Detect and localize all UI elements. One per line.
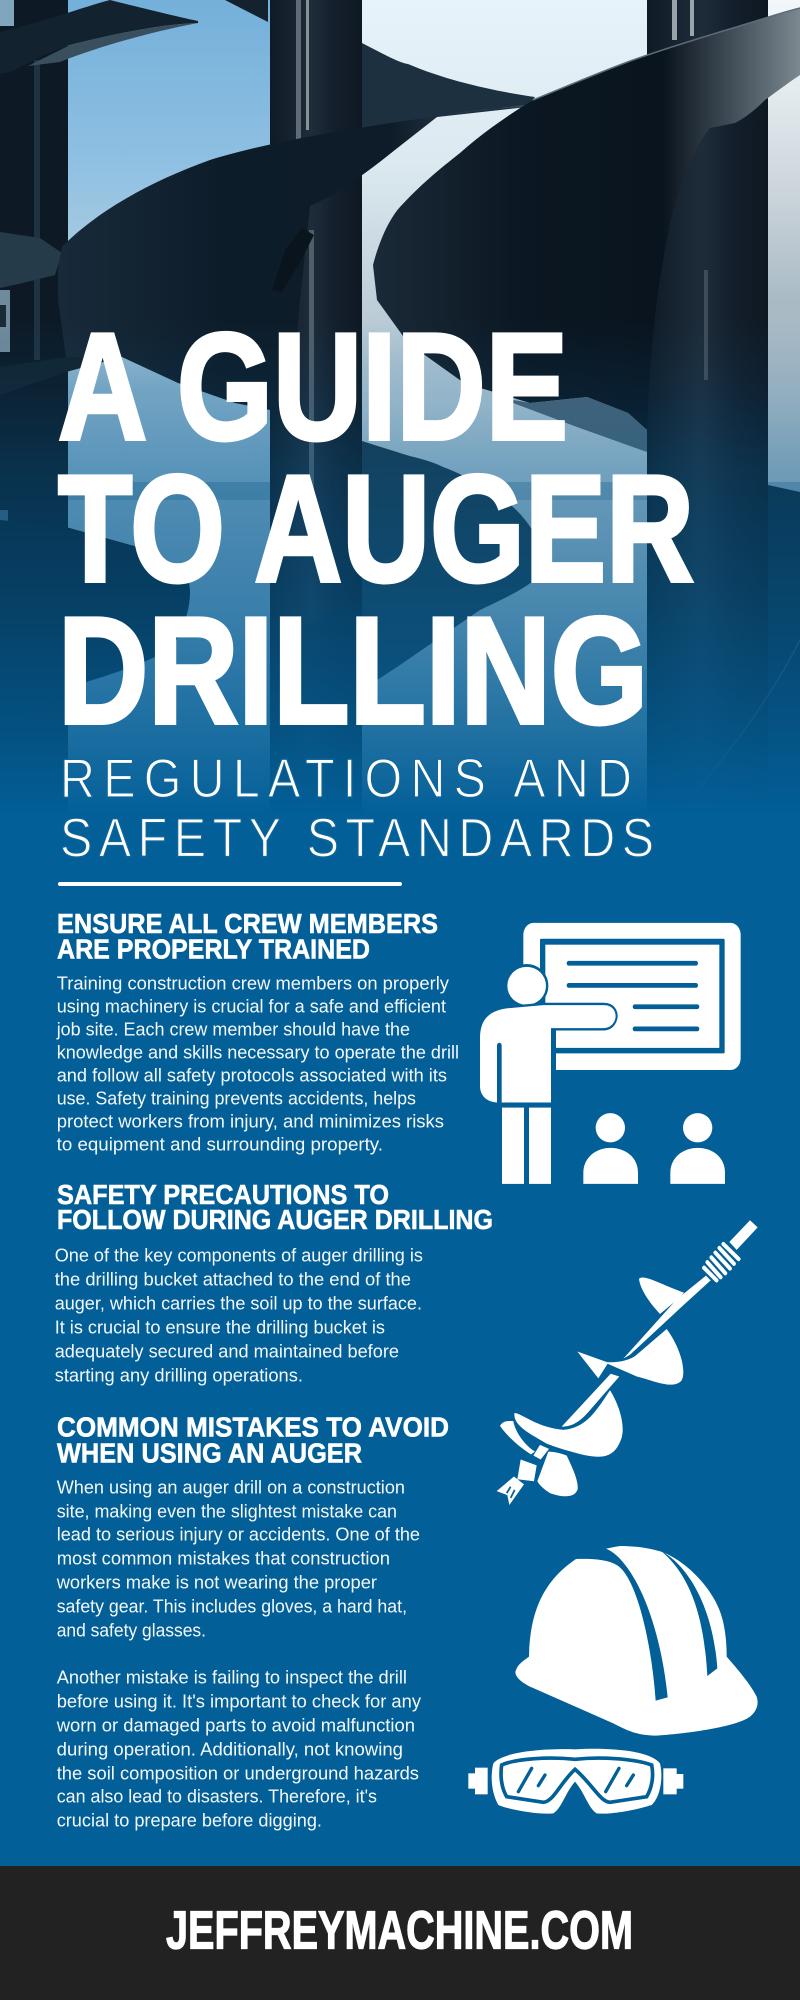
title: DRILLING xyxy=(58,586,648,756)
text block: safety precautions: starting any drilling operations. xyxy=(55,1364,303,1385)
text block: inspection mistake xyxy=(56,1666,422,1831)
text block: safety gear mistake: safety gear. This includes gloves, a hard hat, xyxy=(57,1595,407,1616)
icon: auger bit xyxy=(497,1220,758,1505)
text block: inspection mistake: during operation. Additionally, not knowing xyxy=(57,1738,403,1759)
text block: safety precautions: the drilling bucket attached to the end of the xyxy=(55,1268,411,1289)
text block: crew training: use. Safety training prevents accidents, helps xyxy=(57,1087,416,1108)
title divider line xyxy=(58,882,402,886)
footer bar xyxy=(0,1866,800,2000)
text block: safety gear mistake: When using an auger drill on a construction xyxy=(57,1476,405,1497)
text block: inspection mistake: the soil composition or underground hazards xyxy=(57,1762,419,1783)
text block: inspection mistake: Another mistake is failing to inspect the drill xyxy=(57,1666,407,1687)
text block: safety gear mistake: site, making even the slightest mistake can xyxy=(57,1500,397,1521)
text block: safety precautions: It is crucial to ensure the drilling bucket is xyxy=(55,1316,385,1337)
text block: inspection mistake: worn or damaged parts to avoid malfunction xyxy=(56,1714,415,1735)
heading: safety precautions: FOLLOW DURING AUGER DRILLING xyxy=(57,1204,493,1235)
panel: safety precautions xyxy=(55,1179,758,1505)
text block: safety precautions: auger, which carries the soil up to the surface. xyxy=(55,1292,422,1313)
heading: common mistakes: WHEN USING AN AUGER xyxy=(57,1437,362,1468)
heading: common mistakes: COMMON MISTAKES TO AVOID xyxy=(57,1412,449,1443)
subtitle: SAFETY STANDARDS xyxy=(60,807,654,868)
footer website: JEFFREYMACHINE.COM xyxy=(166,1900,633,1960)
subtitle: REGULATIONS AND xyxy=(60,747,632,809)
text block: crew training: and follow all safety protocols associated with its xyxy=(57,1064,447,1085)
heading: crew training xyxy=(57,908,438,964)
text block: crew training: using machinery is crucial for a safe and efficient xyxy=(57,995,446,1016)
text block: crew training: job site. Each crew member should have the xyxy=(56,1018,410,1039)
text block: inspection mistake: before using it. It's important to check for any xyxy=(57,1690,422,1711)
heading: safety precautions xyxy=(57,1179,493,1235)
icon: hard hat xyxy=(515,1543,758,1736)
heading: common mistakes xyxy=(57,1412,449,1468)
panel: crew training xyxy=(56,908,741,1184)
heading: safety precautions: SAFETY PRECAUTIONS TO xyxy=(57,1179,389,1210)
panel: common mistakes xyxy=(56,1412,758,1831)
text block: safety precautions: adequately secured and maintained before xyxy=(55,1340,399,1361)
title: A GUIDE xyxy=(58,302,568,472)
text block: safety gear mistake: lead to serious injury or accidents. One of the xyxy=(57,1524,420,1545)
text block: safety precautions: One of the key components of auger drilling is xyxy=(55,1244,423,1265)
text block: crew training: protect workers from injury, and minimizes risks xyxy=(57,1110,444,1131)
text block: crew training: Training construction crew members on properly xyxy=(57,972,450,993)
text block: safety precautions xyxy=(55,1244,423,1385)
title xyxy=(58,302,694,756)
text block: safety gear mistake xyxy=(56,1476,420,1640)
hero photo: auger flights xyxy=(0,0,800,815)
text block: crew training: knowledge and skills necessary to operate the drill xyxy=(57,1041,459,1062)
text block: safety gear mistake: most common mistakes that construction xyxy=(57,1547,390,1568)
text block: safety gear mistake: and safety glasses. xyxy=(57,1619,206,1640)
text block: inspection mistake: crucial to prepare before digging. xyxy=(57,1810,322,1831)
heading: crew training: ENSURE ALL CREW MEMBERS xyxy=(57,908,438,939)
icon: instructor at board with students xyxy=(480,923,741,1184)
text block: crew training xyxy=(56,972,459,1154)
heading: crew training: ARE PROPERLY TRAINED xyxy=(57,934,370,964)
text block: inspection mistake: can also lead to disasters. Therefore, it's xyxy=(57,1786,377,1807)
icon: safety goggles xyxy=(468,1749,683,1814)
subtitle xyxy=(60,747,654,868)
text block: crew training: to equipment and surrounding property. xyxy=(57,1133,383,1154)
text block: safety gear mistake: workers make is not wearing the proper xyxy=(56,1571,377,1592)
